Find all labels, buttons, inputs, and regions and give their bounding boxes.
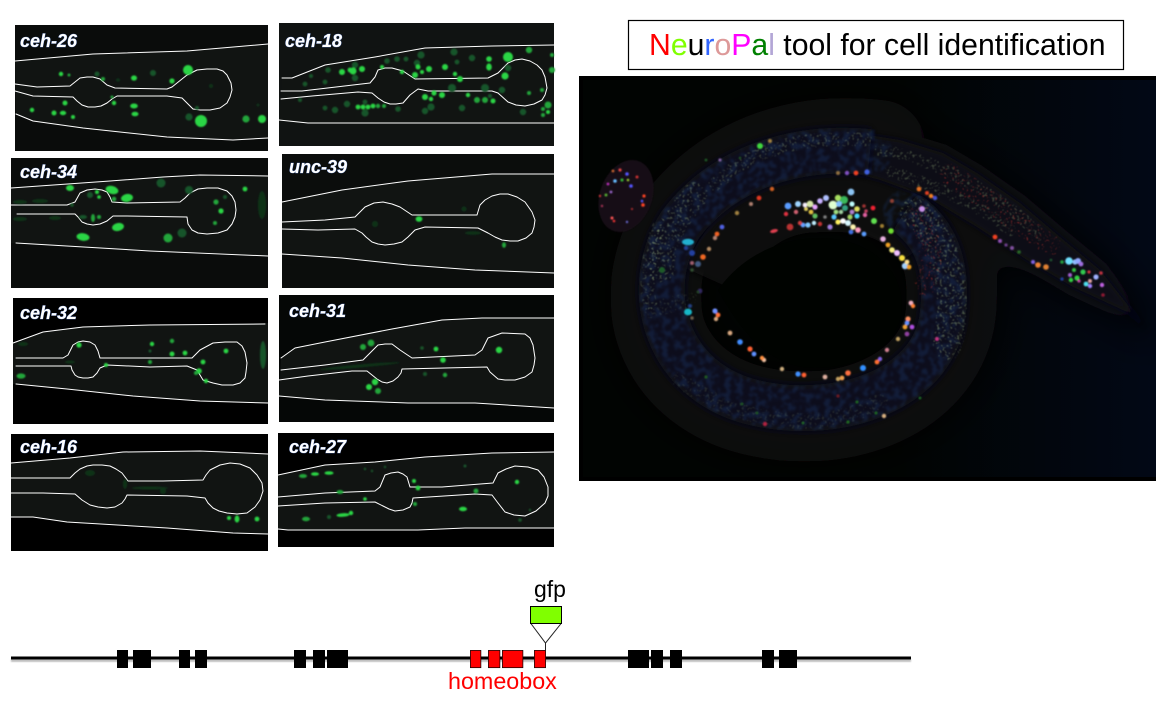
- ceh-18 outlines: [279, 45, 554, 123]
- ceh-27 outlines: [278, 452, 554, 530]
- egg: [598, 160, 654, 232]
- red homeobox exons: [470, 650, 546, 668]
- unc-39 label: unc-39: [289, 157, 347, 177]
- gene line: [11, 656, 911, 662]
- ceh-18 fluorescent cells: [298, 47, 555, 117]
- panel: ceh-16: [11, 434, 268, 551]
- ceh-32 fluorescent cells: [16, 339, 266, 383]
- ceh-18 label: ceh-18: [285, 31, 342, 51]
- ceh-16 label: ceh-16: [20, 437, 78, 457]
- unc-39 fluorescent cells: [372, 206, 506, 248]
- ceh-31 fluorescent cells: [320, 340, 502, 394]
- panel: ceh-18: [279, 23, 555, 146]
- gfp box: [530, 606, 562, 624]
- worm halo: [655, 132, 1150, 417]
- homeobox label: homeobox: [448, 668, 557, 694]
- title box: NeuroPal tool for cell identification: [649, 29, 1105, 62]
- gfp insertion triangle: [530, 623, 562, 650]
- ceh-26 label: ceh-26: [20, 31, 78, 51]
- gfp label: gfp: [534, 576, 566, 602]
- worm head interior: [712, 202, 925, 280]
- ceh-32 outlines: [13, 324, 268, 403]
- ceh-16 outlines: [11, 451, 268, 534]
- ceh-34 label: ceh-34: [20, 162, 77, 182]
- ceh-26 outlines: [15, 44, 268, 140]
- panel: ceh-31: [279, 295, 554, 422]
- worm body: [662, 151, 944, 408]
- ceh-32 label: ceh-32: [20, 303, 77, 323]
- bright neurons: tail: [993, 235, 1105, 297]
- black exons, downstream: [628, 650, 797, 668]
- black exons, upstream: [117, 650, 348, 668]
- unc-39 outlines: [282, 174, 554, 273]
- ceh-34 fluorescent cells: [13, 178, 266, 242]
- gene diagram: [11, 650, 911, 694]
- ceh-31 label: ceh-31: [289, 301, 346, 321]
- ceh-26 fluorescent cells: [30, 65, 266, 127]
- ceh-27 fluorescent cells: [299, 464, 531, 522]
- bright neurons: upper body and neck: [659, 139, 937, 293]
- panel: NeuroPal micrograph: [579, 76, 1156, 481]
- bright neurons: head cluster: [770, 189, 925, 236]
- panel: ceh-32: [13, 298, 268, 424]
- ceh-16 fluorescent cells: [85, 470, 259, 523]
- panel: unc-39: [282, 154, 554, 288]
- worm tail: [871, 139, 1130, 312]
- central hole: [722, 247, 772, 290]
- ceh-34 outlines: [11, 175, 268, 256]
- ceh-31 outlines: [279, 318, 554, 408]
- ceh-27 label: ceh-27: [289, 437, 347, 457]
- panel: ceh-34: [11, 158, 268, 288]
- gfp insertion marker: [530, 576, 566, 650]
- panel: ceh-26: [15, 25, 268, 151]
- panel: ceh-27: [278, 433, 554, 547]
- title box: [628, 20, 1124, 70]
- body speckle: [648, 139, 1050, 421]
- bright neurons: along inner body curve: [684, 236, 939, 426]
